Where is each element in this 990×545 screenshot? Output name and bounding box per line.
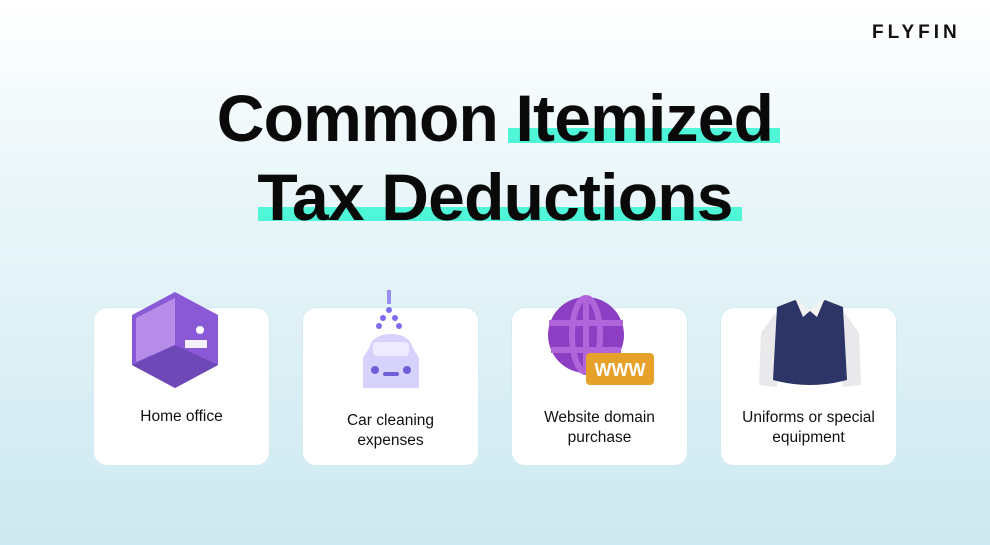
title: Tax Deductions — [257, 160, 733, 234]
card: website: purchase — [568, 429, 631, 446]
title highlight 1 — [508, 128, 780, 143]
icon: globe www — [548, 295, 654, 385]
icon: car wash — [363, 290, 419, 388]
card: home office — [93, 307, 270, 466]
icon: vest — [759, 298, 861, 387]
card: website — [511, 307, 688, 466]
icon: globe www: WWW — [595, 360, 645, 380]
title highlight 2 — [258, 207, 742, 221]
title: Common Itemized — [217, 81, 773, 155]
card: car cleaning: expenses — [357, 432, 424, 449]
card: car cleaning — [302, 307, 479, 466]
card: home office: Home office — [140, 408, 223, 425]
card: website: Website domain — [544, 409, 655, 426]
card: uniforms: equipment — [772, 429, 845, 446]
icon: home office — [132, 292, 218, 388]
logo: FLYFIN — [872, 22, 961, 43]
title — [217, 81, 773, 234]
card: uniforms: Uniforms or special — [742, 409, 875, 426]
card: car cleaning: Car cleaning — [347, 412, 434, 429]
card: uniforms — [720, 307, 897, 466]
